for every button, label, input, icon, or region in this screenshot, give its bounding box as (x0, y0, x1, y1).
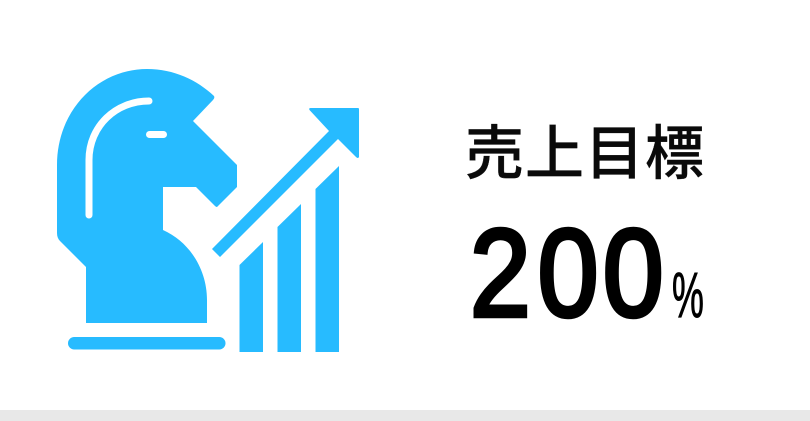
heading: sales target: 売上目標 (465, 121, 705, 187)
icon: knight base (68, 337, 226, 350)
icon: knight mane line (89, 101, 149, 215)
bar chart: rising bars (240, 166, 339, 352)
figure: 200 percent (470, 203, 704, 343)
number: 200: 200 (470, 203, 664, 343)
icon: knight eye (146, 131, 167, 138)
unit: percent sign: % (672, 259, 704, 331)
footer band (0, 410, 810, 421)
icon: chess knight head (57, 69, 237, 323)
arrow: upward trend (212, 108, 359, 257)
icon: chess knight with rising bar chart (57, 69, 359, 352)
